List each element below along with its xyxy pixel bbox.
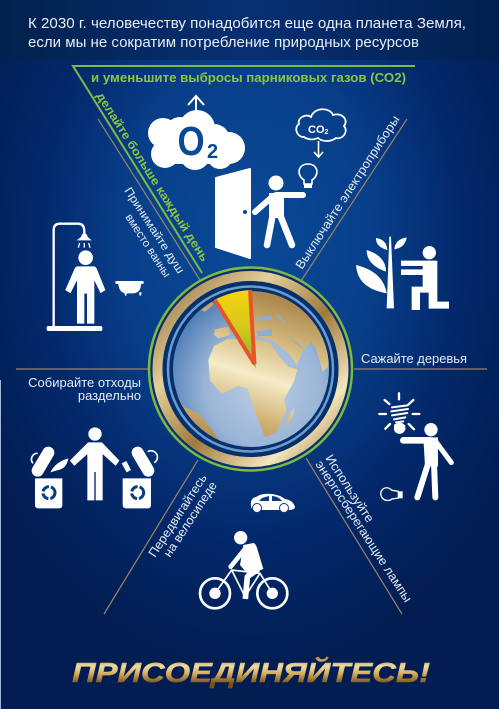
divider lines: [16, 119, 487, 614]
icon: old bulb: [381, 488, 403, 500]
red wedge: [214, 290, 256, 368]
continents: [177, 292, 329, 452]
icon: energy-saving bulb and person: [379, 393, 451, 500]
call to action: ПРИСОЕДИНЯЙТЕСЬ!: [72, 656, 430, 688]
text: use energy-saving lamps: Используйте: [322, 452, 377, 525]
icon: CO2 cloud: [296, 109, 346, 157]
icon: person sorting waste: [31, 427, 157, 508]
text: plant trees: Сажайте деревья: [361, 351, 467, 366]
text: sort waste: Собирайте отходы: [28, 375, 141, 390]
text: turn off appliances: Выключайте электроприборы: [293, 113, 403, 272]
seas: [256, 312, 305, 350]
icon: door: [216, 169, 250, 258]
text: sort waste: раздельно: [78, 388, 141, 403]
icon: shower and person: [47, 224, 144, 331]
icon: person switching off lamp: [255, 164, 317, 245]
text: take a shower: вместо ванны: [122, 212, 172, 280]
icon: CO2 cloud: 2: [324, 129, 328, 136]
globe: [149, 268, 352, 470]
icon: oxygen cloud: O: [178, 119, 205, 165]
icon: person planting a tree: [356, 237, 449, 310]
green triangle frame: [73, 66, 415, 273]
header band: [0, 0, 499, 60]
text: sort waste: [28, 375, 141, 403]
text: ride a bike: Передвигайтесь: [146, 471, 210, 560]
icon: oxygen cloud: 2: [207, 141, 218, 163]
icon: right recycling bin: [122, 451, 157, 508]
icon: left recycling bin: [31, 453, 68, 508]
header text: если мы не сократим потребление природных ресурсов: [28, 34, 419, 51]
header text: К 2030 г. человечеству понадобится еще одна планета Земля,: [28, 15, 466, 32]
icon: CO2 cloud: CO: [308, 124, 324, 136]
icon: oxygen cloud: [148, 96, 245, 170]
icon: light bulb: [299, 164, 317, 188]
icon: bathtub: [115, 281, 144, 296]
text: take a shower: Принимайте душ: [121, 186, 186, 276]
header text: [28, 15, 466, 51]
icon: car: [251, 494, 295, 512]
text: use energy-saving lamps: энергосберегающие лампы: [312, 458, 415, 605]
green heading: reduce emissions: и уменьшите выбросы парниковых газов (СО2): [91, 70, 406, 85]
icon: cyclist: [200, 531, 287, 608]
text: ride a bike: на велосипеде: [161, 479, 220, 560]
green heading: do more every day: делайте больше каждый день: [93, 90, 212, 264]
